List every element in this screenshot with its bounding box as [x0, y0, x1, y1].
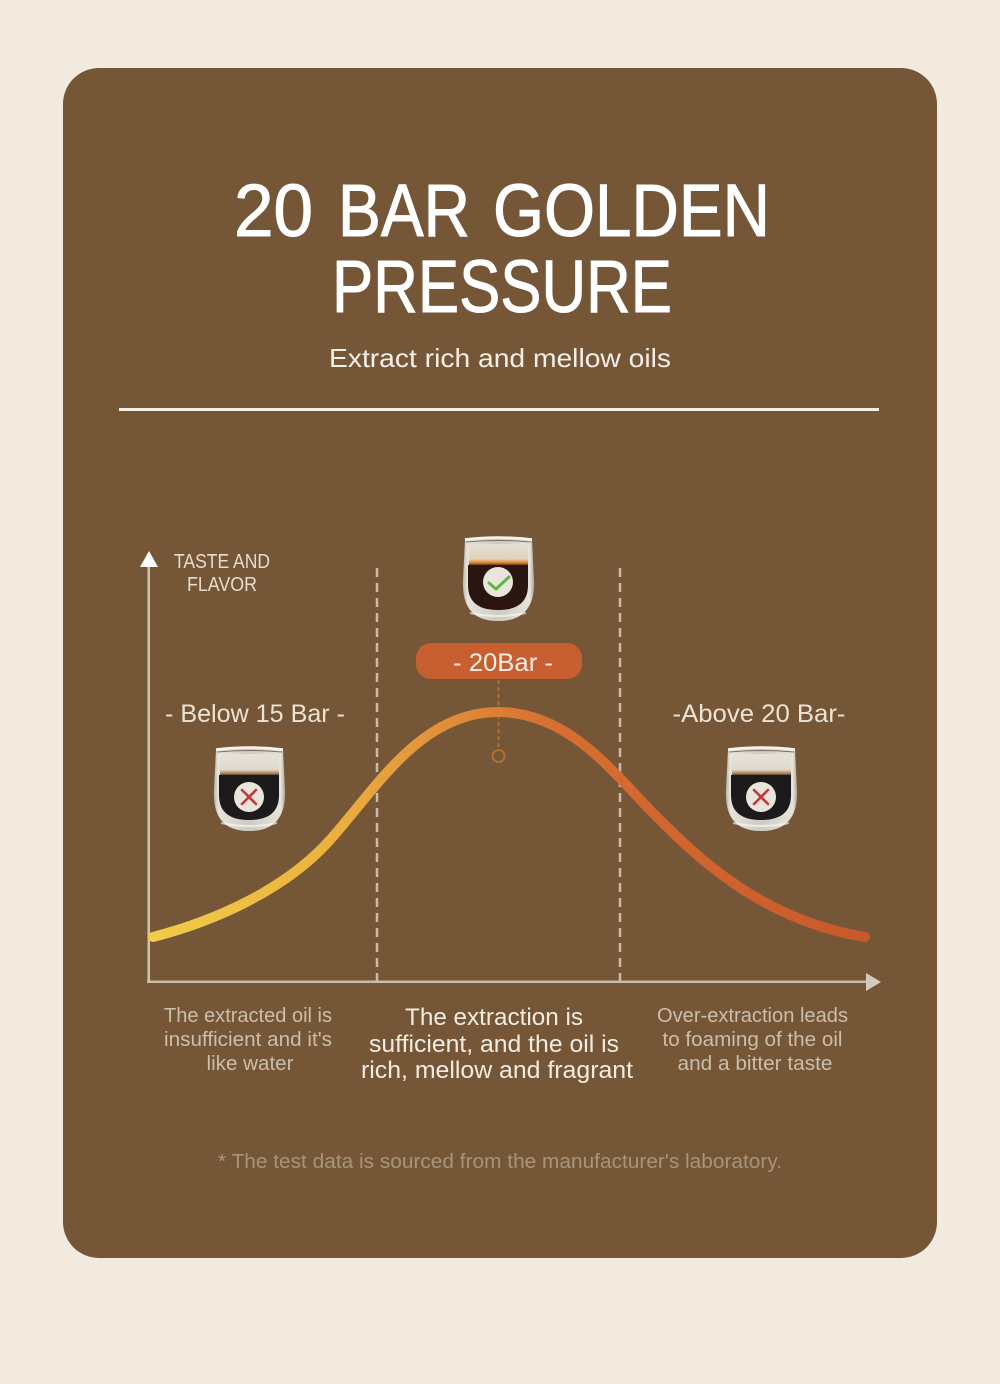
text: below 15 bar description: insufficient and it's	[164, 1029, 332, 1051]
label: below 15 bar: - Below 15 Bar -	[165, 700, 345, 728]
text: 20 bar description	[361, 1004, 633, 1084]
y axis arrow	[140, 551, 158, 983]
panel: brown card	[63, 68, 937, 1258]
badge: 20Bar: - 20Bar -	[453, 649, 553, 677]
title: PRESSURE	[332, 245, 672, 328]
icon: good espresso glass with check	[463, 538, 534, 621]
text: 20 bar description: sufficient, and the oil is	[369, 1031, 619, 1058]
pressure curve	[153, 712, 865, 937]
title: BAR	[338, 169, 470, 252]
text: below 15 bar description	[164, 1005, 332, 1075]
text: 20 bar description: rich, mellow and fragrant	[361, 1057, 633, 1084]
text: below 15 bar description: like water	[206, 1053, 294, 1075]
y axis label: FLAVOR	[187, 574, 257, 596]
badge: 20Bar	[416, 643, 582, 679]
zone boundary: right dashed line	[619, 568, 621, 981]
text: 20 bar description: The extraction is	[405, 1004, 583, 1031]
y axis label: TASTE AND	[174, 551, 270, 573]
x axis arrow	[147, 973, 881, 991]
text: above 20 bar description: Over-extraction leads	[657, 1005, 848, 1027]
text: above 20 bar description: to foaming of the oil	[662, 1029, 842, 1051]
peak marker	[492, 680, 504, 762]
subtitle: Extract rich and mellow oils	[329, 343, 671, 373]
title: 20	[234, 169, 313, 252]
text: below 15 bar description: The extracted oil is	[164, 1005, 332, 1027]
text: above 20 bar description: and a bitter taste	[678, 1053, 832, 1075]
title	[234, 169, 770, 328]
icon: bitter espresso glass with cross	[726, 748, 797, 831]
label: above 20 bar: -Above 20 Bar-	[672, 700, 846, 728]
text: above 20 bar description	[657, 1005, 848, 1075]
y axis label	[174, 551, 270, 596]
chart: taste and flavor versus pressure	[140, 551, 881, 991]
zone boundary: left dashed line	[376, 568, 378, 981]
divider	[119, 408, 879, 411]
footnote: * The test data is sourced from the manufacturer's laboratory.	[218, 1151, 782, 1173]
icon: weak espresso glass with cross	[214, 748, 285, 831]
title: GOLDEN	[493, 169, 770, 252]
